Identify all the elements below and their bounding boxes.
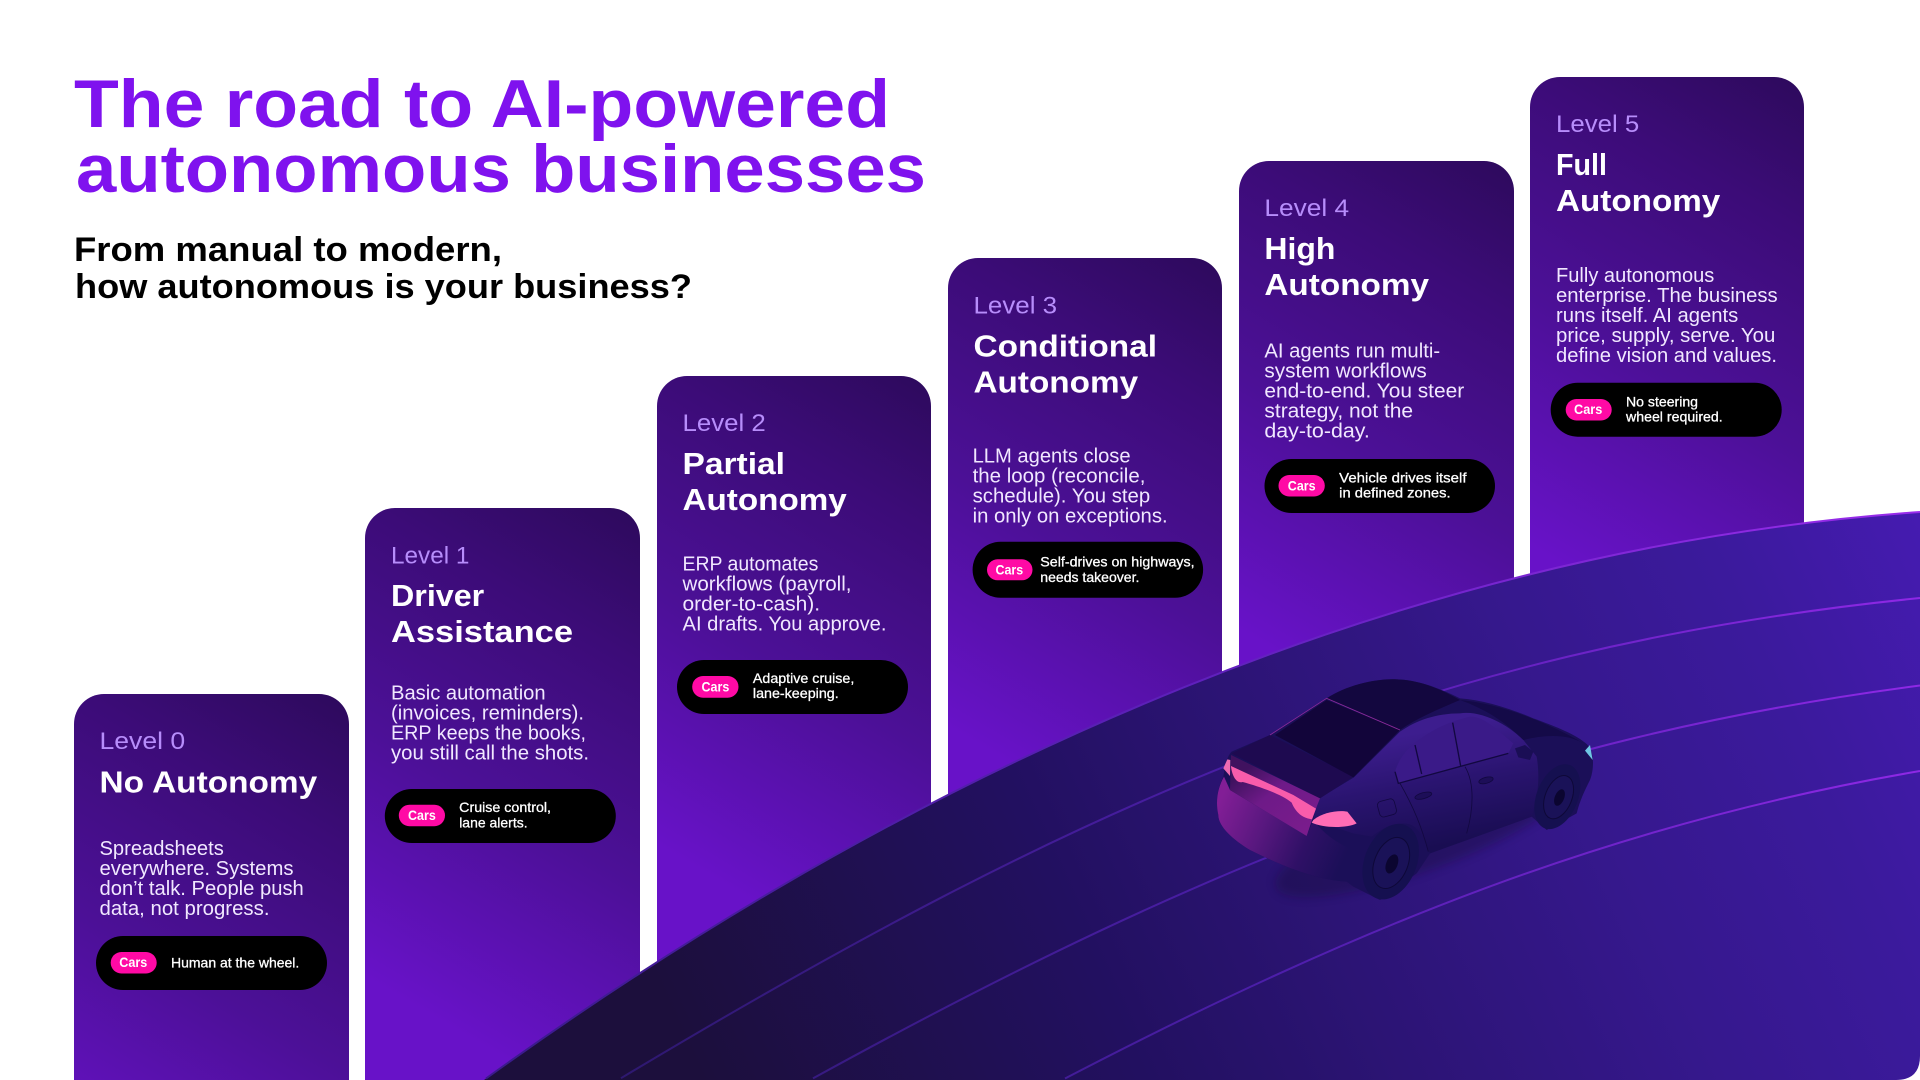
car hood bbox=[1460, 700, 1583, 743]
callout: cars: Cars bbox=[119, 954, 147, 970]
heading bbox=[974, 329, 1157, 400]
callout: cars bbox=[1264, 459, 1495, 513]
description: ERP keeps the books, bbox=[391, 722, 586, 744]
description: end-to-end. You steer bbox=[1264, 381, 1465, 403]
callout: cars bbox=[385, 789, 616, 843]
panel: level 4 bbox=[1239, 161, 1514, 801]
description bbox=[391, 682, 589, 764]
car door details bbox=[1377, 767, 1494, 852]
level label: Level 0 bbox=[100, 728, 185, 755]
car body bbox=[1217, 679, 1593, 900]
callout: cars: Self-drives on highways, bbox=[1040, 553, 1195, 569]
description: price, supply, serve. You bbox=[1556, 325, 1775, 347]
description: LLM agents close bbox=[973, 446, 1131, 468]
callout: cars: in defined zones. bbox=[1339, 485, 1451, 501]
level label: Level 3 bbox=[974, 292, 1057, 319]
car side windows bbox=[1395, 717, 1513, 783]
car tail lights bbox=[1223, 759, 1357, 827]
description: schedule). You step bbox=[973, 486, 1150, 508]
description: strategy, not the bbox=[1264, 401, 1413, 423]
callout: cars: Adaptive cruise, bbox=[753, 670, 854, 686]
subtitle: From manual to modern, bbox=[74, 231, 502, 269]
road bbox=[484, 512, 1920, 1080]
heading: Autonomy bbox=[1264, 267, 1430, 302]
description bbox=[973, 446, 1168, 528]
description: AI agents run multi- bbox=[1264, 341, 1440, 363]
title: The road to AI-powered bbox=[74, 66, 890, 142]
description bbox=[100, 838, 304, 920]
heading: Conditional bbox=[974, 329, 1157, 364]
description: (invoices, reminders). bbox=[391, 702, 584, 724]
callout: cars: Cars bbox=[1574, 401, 1602, 417]
description: the loop (reconcile, bbox=[973, 466, 1145, 488]
description: system workflows bbox=[1264, 361, 1427, 383]
callout: cars: needs takeover. bbox=[1040, 569, 1139, 585]
description bbox=[1264, 341, 1465, 443]
car bbox=[1217, 679, 1593, 921]
heading bbox=[682, 446, 848, 517]
heading bbox=[391, 578, 573, 649]
description: ERP automates bbox=[682, 554, 818, 576]
heading bbox=[1264, 231, 1430, 302]
callout: cars: Cars bbox=[702, 678, 729, 694]
callout: cars: lane-keeping. bbox=[753, 685, 839, 701]
description: in only on exceptions. bbox=[973, 506, 1168, 528]
subtitle bbox=[74, 231, 692, 306]
car trunk bbox=[1232, 735, 1353, 798]
panel: level 2 bbox=[657, 376, 931, 1016]
car rear window bbox=[1275, 700, 1400, 777]
car front wheel bbox=[1525, 757, 1589, 836]
description: AI drafts. You approve. bbox=[682, 614, 887, 636]
panel: level 0 bbox=[74, 694, 349, 1080]
description bbox=[681, 554, 886, 636]
heading: Full bbox=[1556, 147, 1607, 182]
car mirror bbox=[1515, 745, 1533, 760]
heading: No Autonomy bbox=[100, 764, 318, 800]
car headlight bbox=[1585, 745, 1593, 760]
description: Fully autonomous bbox=[1556, 265, 1714, 287]
callout: cars: Vehicle drives itself bbox=[1339, 469, 1467, 485]
car side panel bbox=[1313, 713, 1538, 853]
description: enterprise. The business bbox=[1556, 285, 1778, 307]
subtitle: how autonomous is your business? bbox=[75, 268, 692, 306]
callout: cars: lane alerts. bbox=[459, 814, 528, 830]
callout: cars bbox=[677, 660, 908, 714]
description: workflows (payroll, bbox=[681, 574, 851, 596]
description: define vision and values. bbox=[1556, 345, 1777, 367]
callout: cars: Human at the wheel. bbox=[171, 954, 299, 970]
heading bbox=[1556, 147, 1721, 218]
description: Basic automation bbox=[391, 682, 546, 704]
panel: level 1 bbox=[365, 508, 640, 1080]
level label: Level 2 bbox=[682, 410, 766, 437]
callout: cars: No steering bbox=[1626, 394, 1698, 410]
panel: level 5 bbox=[1530, 77, 1804, 637]
heading: Autonomy bbox=[682, 482, 848, 517]
description: runs itself. AI agents bbox=[1556, 305, 1738, 327]
callout: cars: Cars bbox=[996, 562, 1023, 578]
panel: level 3 bbox=[948, 258, 1222, 898]
heading: Driver bbox=[391, 578, 484, 613]
description: Spreadsheets bbox=[100, 838, 224, 860]
description: data, not progress. bbox=[100, 898, 270, 920]
heading: Partial bbox=[682, 446, 785, 481]
heading: High bbox=[1264, 231, 1335, 266]
callout: cars: Cars bbox=[1288, 478, 1316, 494]
description: day-to-day. bbox=[1264, 421, 1370, 443]
description: don’t talk. People push bbox=[100, 878, 304, 900]
heading: Autonomy bbox=[1556, 183, 1721, 218]
level label: Level 5 bbox=[1556, 111, 1639, 138]
level label: Level 4 bbox=[1264, 195, 1349, 222]
title bbox=[74, 66, 926, 207]
heading: Autonomy bbox=[974, 365, 1139, 400]
car rear bumper bbox=[1217, 777, 1353, 882]
car rear wheel bbox=[1352, 815, 1430, 908]
title: autonomous businesses bbox=[76, 131, 926, 207]
car roof bbox=[1327, 679, 1460, 730]
callout: cars: Cars bbox=[408, 807, 436, 823]
description bbox=[1556, 265, 1778, 367]
description: order-to-cash). bbox=[682, 594, 820, 616]
callout: cars bbox=[96, 936, 327, 990]
heading: Assistance bbox=[391, 614, 573, 649]
callout: cars: Cruise control, bbox=[459, 799, 551, 815]
callout: cars bbox=[1551, 383, 1782, 437]
callout: cars: wheel required. bbox=[1625, 408, 1723, 424]
car rear panel bbox=[1230, 755, 1320, 836]
description: everywhere. Systems bbox=[100, 858, 294, 880]
level label: Level 1 bbox=[391, 542, 469, 569]
callout: cars bbox=[973, 542, 1203, 598]
description: you still call the shots. bbox=[391, 742, 589, 764]
